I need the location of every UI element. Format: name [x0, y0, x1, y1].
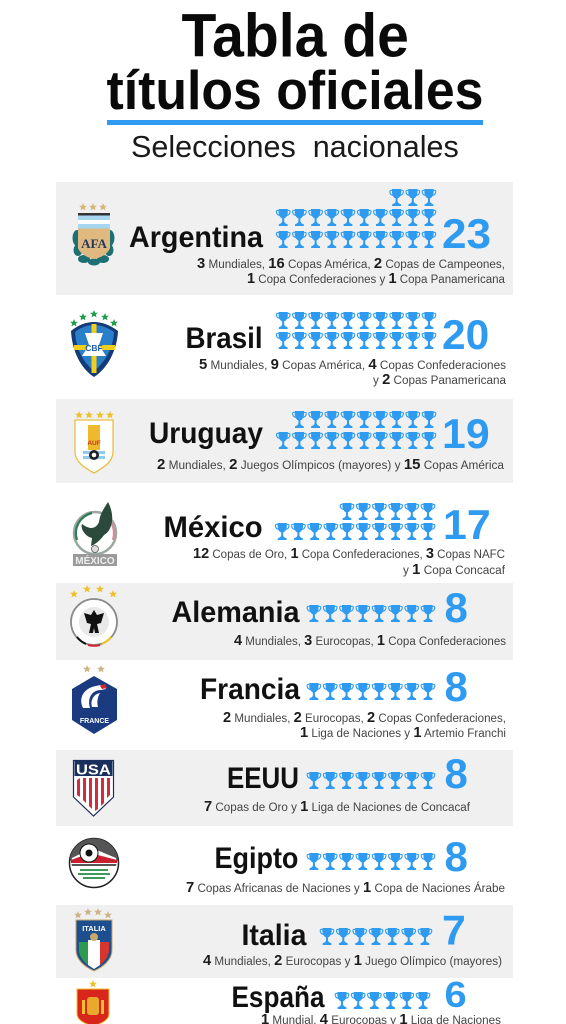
icon: Argentina crest: [72, 203, 114, 266]
icon: Francia crest: [72, 665, 117, 734]
icon: Brasil crest: [70, 310, 118, 377]
panel: México: [73, 501, 506, 578]
icon: EEUU crest: [74, 760, 114, 816]
title: [106, 2, 483, 121]
total: 8: 8: [444, 833, 468, 880]
trophies: 7: [320, 928, 432, 945]
breakdown: Argentina: 1 Copa Confederaciones y 1 Copa Panamericana: [247, 271, 506, 287]
total: 23: 23: [442, 211, 491, 258]
panel: EEUU: [56, 750, 513, 826]
title underline: [107, 120, 483, 125]
icon: Alemania crest: [70, 585, 117, 646]
label: Brasil: Brasil: [186, 322, 263, 355]
trophies: 6: [335, 992, 430, 1009]
breakdown: Uruguay: 2 Mundiales, 2 Juegos Olímpicos (mayores) y 15 Copas América: [157, 457, 505, 473]
label: México: México: [164, 511, 263, 544]
total: 8: 8: [444, 750, 468, 797]
icon: España crest: [77, 980, 109, 1024]
label: EEUU: EEUU: [227, 761, 299, 794]
breakdown: Egipto: 7 Copas Africanas de Naciones y 1 Copa de Naciones Árabe: [186, 880, 505, 896]
total: 7: 7: [442, 907, 466, 953]
panel: Argentina: [56, 182, 513, 295]
breakdown: Alemania: 4 Mundiales, 3 Eurocopas, 1 Copa Confederaciones: [234, 633, 506, 649]
total: 8: 8: [444, 663, 468, 710]
trophies: 8: [307, 772, 435, 789]
trophies: 8: [307, 683, 435, 700]
trophies: 8: [307, 853, 435, 870]
breakdown: México: [193, 546, 506, 578]
icon: Francia crest: FRANCE: [80, 718, 109, 725]
trophies: 19: [276, 411, 436, 449]
total: 20: 20: [442, 311, 489, 358]
panel: Italia: [56, 905, 513, 978]
panel: Uruguay: [56, 399, 513, 483]
label: Francia: Francia: [200, 673, 301, 706]
total: 6: 6: [444, 976, 467, 1016]
icon: Egipto crest: [70, 838, 118, 888]
trophies: 8: [307, 605, 435, 622]
icon: México crest: [73, 502, 117, 567]
icon: México crest: MÉXICO: [75, 554, 115, 567]
icon: Uruguay crest: AUF: [87, 440, 101, 447]
breakdown: Francia: 2 Mundiales, 2 Eurocopas, 2 Copas Confederaciones,: [223, 710, 506, 726]
label: España: España: [232, 980, 325, 1013]
total: 19: 19: [442, 410, 490, 457]
icon: Uruguay crest: [75, 411, 114, 473]
title: títulos oficiales: [106, 61, 483, 121]
total: 8: 8: [444, 584, 468, 631]
icon: Brasil crest: CBF: [85, 343, 103, 353]
trophies: 17: [275, 503, 435, 540]
label: Italia: Italia: [242, 919, 307, 952]
breakdown: EEUU: 7 Copas de Oro y 1 Liga de Naciones de Concacaf: [204, 799, 471, 815]
breakdown: Brasil: y 2 Copas Panamericana: [373, 372, 507, 388]
breakdown: México: y 1 Copa Concacaf: [403, 562, 506, 578]
icon: Argentina crest: AFA: [81, 236, 107, 251]
panel: España: [77, 976, 501, 1024]
label: Egipto: Egipto: [214, 842, 298, 875]
breakdown: Francia: [223, 710, 506, 741]
trophies: 20: [276, 312, 436, 349]
panel: Alemania: [56, 583, 513, 660]
icon: Italia crest: ITALIA: [82, 924, 106, 933]
panel: Francia: [72, 663, 506, 741]
panel: Egipto: [70, 833, 505, 896]
breakdown: Argentina: 3 Mundiales, 16 Copas América, 2 Copas de Campeones,: [197, 256, 505, 272]
label: Alemania: Alemania: [172, 595, 300, 629]
label: Uruguay: Uruguay: [149, 417, 263, 450]
title: Tabla de: [182, 2, 409, 70]
breakdown: Brasil: 5 Mundiales, 9 Copas América, 4 Copas Confederaciones: [199, 357, 506, 373]
label: Argentina: Argentina: [129, 220, 264, 254]
breakdown: Brasil: [199, 357, 507, 388]
breakdown: Francia: 1 Liga de Naciones y 1 Artemio Franchi: [300, 725, 506, 741]
icon: Italia crest: [74, 908, 112, 971]
trophies: 23: [276, 189, 436, 248]
icon: EEUU crest: USA: [76, 762, 111, 778]
breakdown: México: 12 Copas de Oro, 1 Copa Confederaciones, 3 Copas NAFC: [193, 546, 505, 562]
total: 17: 17: [443, 501, 491, 548]
panel: Brasil: [70, 310, 507, 388]
subtitle: Selecciones nacionales: [131, 129, 459, 164]
breakdown: Italia: 4 Mundiales, 2 Eurocopas y 1 Juego Olímpico (mayores): [203, 953, 502, 969]
breakdown: Argentina: [197, 256, 506, 287]
